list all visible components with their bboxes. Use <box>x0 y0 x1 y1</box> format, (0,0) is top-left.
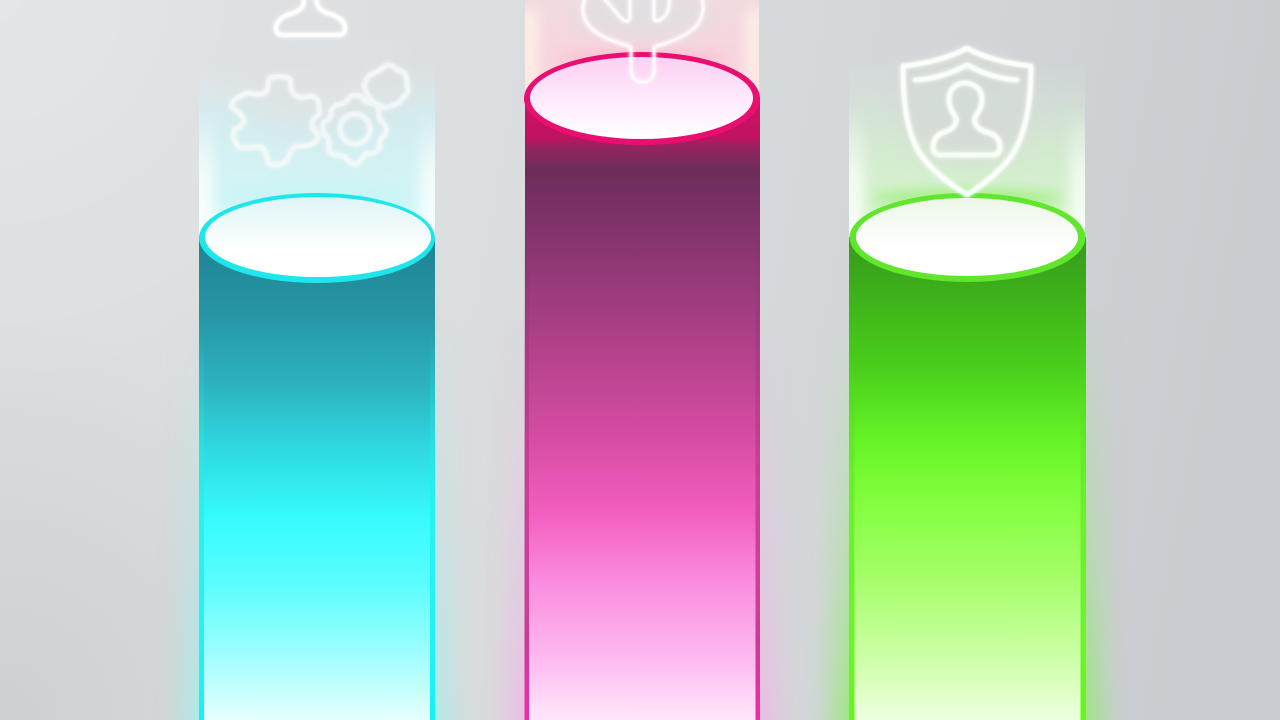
gear: small <box>364 65 408 108</box>
cylinder: teal <box>199 193 435 720</box>
beam: green <box>849 84 1085 237</box>
icon: dollar coin (partial) <box>583 0 703 82</box>
beam: teal <box>199 91 435 236</box>
cylinder top: teal <box>199 193 435 283</box>
gear: large <box>231 77 319 165</box>
cylinder top: green <box>850 193 1086 282</box>
icon: gears <box>231 65 408 165</box>
icon: shield with person <box>903 48 1031 195</box>
shield outline <box>903 48 1031 195</box>
gear: medium hub <box>340 114 370 144</box>
shield inner band <box>915 65 1017 80</box>
icon: person (partial, top of teal cylinder) <box>276 0 345 35</box>
gear: medium <box>323 95 386 164</box>
beam: pink <box>525 0 759 92</box>
cylinder: green <box>849 193 1086 720</box>
person silhouette <box>933 83 1000 155</box>
cylinder: pink <box>524 52 760 720</box>
side glow: cylinders <box>183 320 1101 720</box>
cylinder top: pink <box>524 52 760 145</box>
